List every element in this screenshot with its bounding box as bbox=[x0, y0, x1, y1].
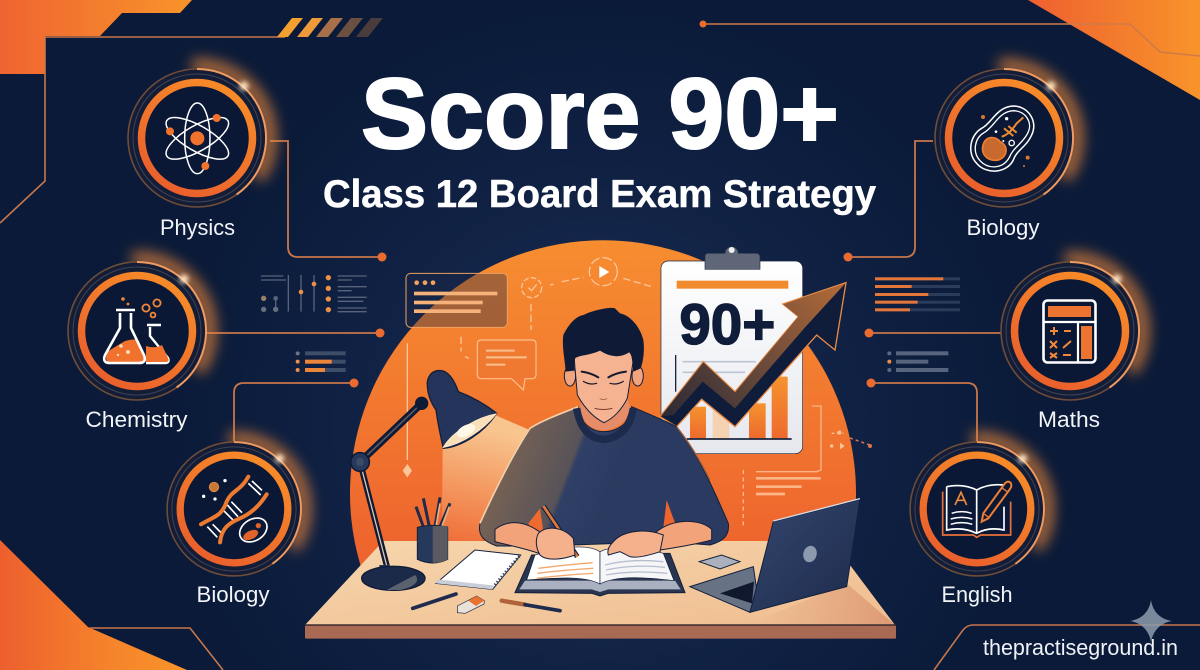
label: biology left: Biology bbox=[196, 582, 270, 607]
decor: slider widget bbox=[261, 275, 367, 312]
icon: cell bbox=[971, 106, 1034, 171]
pens and eraser bbox=[413, 594, 560, 613]
watermark sparkle bbox=[1130, 600, 1172, 642]
right forearm bbox=[648, 521, 712, 552]
icon: open book and pen bbox=[943, 482, 1011, 537]
notebook bbox=[436, 550, 521, 589]
panel: english bbox=[910, 439, 1047, 607]
pencil bbox=[543, 506, 577, 557]
label: physics: Physics bbox=[160, 215, 235, 240]
icon: calculator bbox=[1044, 300, 1096, 362]
frame line dot bbox=[700, 20, 706, 28]
icon: dna helix bbox=[201, 477, 271, 547]
gaps beside torso bbox=[528, 508, 544, 542]
open book bbox=[515, 547, 685, 596]
resting hand bbox=[608, 531, 663, 557]
floating browser window bbox=[406, 273, 507, 327]
writing hand bbox=[536, 528, 575, 559]
score text: 90+ bbox=[679, 293, 775, 357]
face bbox=[574, 343, 633, 423]
neck bbox=[580, 395, 631, 431]
connector dots bbox=[350, 252, 876, 388]
decor: left mini bars bbox=[296, 351, 346, 372]
panel: biology left bbox=[167, 439, 304, 607]
chat bubble bbox=[477, 340, 536, 390]
lamp light bbox=[442, 415, 533, 542]
right decor lines bbox=[743, 406, 821, 527]
website label: thepractiseground.in bbox=[983, 635, 1178, 660]
clipboard bbox=[661, 247, 803, 454]
hash stripes bbox=[277, 18, 383, 37]
play icon bbox=[403, 258, 652, 477]
panel: chemistry bbox=[68, 259, 209, 432]
label: biology right: Biology bbox=[966, 215, 1040, 240]
sun circle bbox=[350, 240, 856, 625]
label: maths: Maths bbox=[1038, 407, 1100, 432]
subtitle: Class 12 Board Exam Strategy bbox=[323, 173, 876, 216]
hair bbox=[563, 308, 644, 372]
central illustration bbox=[305, 247, 896, 639]
icon: flasks bbox=[104, 297, 169, 363]
dashed trail bbox=[850, 438, 872, 448]
label: english: English bbox=[942, 582, 1012, 607]
icon: atom bbox=[160, 103, 234, 174]
laptop bbox=[690, 499, 860, 612]
panel: physics bbox=[128, 66, 269, 240]
growth arrow bbox=[660, 283, 846, 427]
sweater bbox=[479, 407, 729, 546]
corner shape: top left bbox=[0, 0, 192, 74]
phone bbox=[699, 555, 740, 569]
person bbox=[479, 308, 729, 559]
ears bbox=[564, 366, 576, 386]
corner shape: bottom left bbox=[0, 540, 187, 670]
right dashed path bbox=[830, 431, 845, 449]
corner shape: top right bbox=[1028, 0, 1200, 100]
decor: right list bbox=[887, 351, 948, 372]
lamp bbox=[351, 371, 497, 590]
panel: biology right bbox=[935, 66, 1076, 240]
desk bbox=[305, 541, 896, 639]
pencil cup bbox=[416, 497, 450, 563]
facial features bbox=[582, 372, 626, 409]
connector lines bbox=[205, 141, 1002, 442]
title: Score 90+ bbox=[361, 58, 839, 170]
clipboard clip bbox=[705, 247, 760, 269]
panel: maths bbox=[1001, 259, 1142, 432]
label: chemistry: Chemistry bbox=[86, 407, 188, 432]
left forearm bbox=[495, 523, 543, 555]
mini chart bbox=[676, 355, 792, 439]
decor: right progress bars bbox=[875, 277, 960, 311]
